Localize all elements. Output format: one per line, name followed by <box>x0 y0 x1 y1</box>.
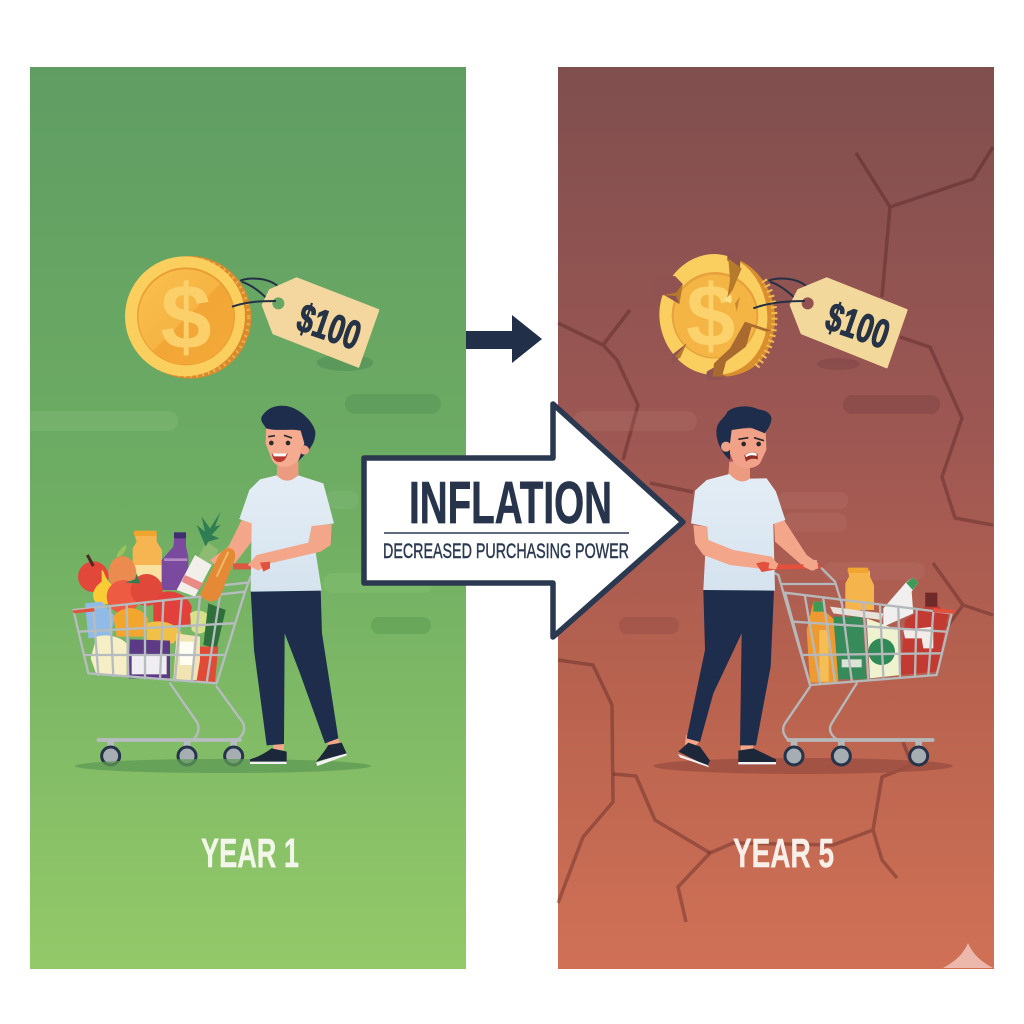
label: year 1: YEAR 1 <box>201 830 299 876</box>
shopper: happy <box>210 406 347 766</box>
small arrow <box>466 315 542 363</box>
panel: year 1 <box>30 67 466 969</box>
price tag: $100: $100 <box>820 293 896 358</box>
coin <box>125 256 251 379</box>
ground shadow <box>653 758 953 774</box>
white corner mark <box>943 943 993 968</box>
cart full of groceries <box>72 512 260 765</box>
groceries <box>807 568 948 683</box>
cracked coin <box>653 252 775 380</box>
shopper: worried <box>678 406 822 767</box>
price tag: $100: $100 <box>291 294 367 359</box>
panel background: green <box>30 67 466 969</box>
ground shadow <box>75 759 371 773</box>
label: year 5: YEAR 5 <box>733 830 834 876</box>
rim gaps showing panel <box>653 276 683 304</box>
coin: $ <box>161 266 211 368</box>
panel: year 5 <box>558 67 994 969</box>
big inflation arrow <box>364 404 683 637</box>
arrow shape <box>364 404 683 637</box>
cart with few groceries <box>767 568 955 765</box>
panel background: cracked red <box>558 67 994 969</box>
cracks <box>558 147 993 922</box>
cart frame <box>73 570 260 753</box>
groceries <box>78 512 226 683</box>
price tag: $100 <box>753 278 907 370</box>
coin fractures <box>727 258 742 297</box>
cracked coin: $ <box>686 266 735 365</box>
baguette in front of arm <box>200 548 235 601</box>
subheading: DECREASED PURCHASING POWER <box>383 540 629 563</box>
price tag: $100 <box>232 278 378 371</box>
cart frame <box>767 568 952 753</box>
heading: inflation: INFLATION <box>409 470 612 536</box>
